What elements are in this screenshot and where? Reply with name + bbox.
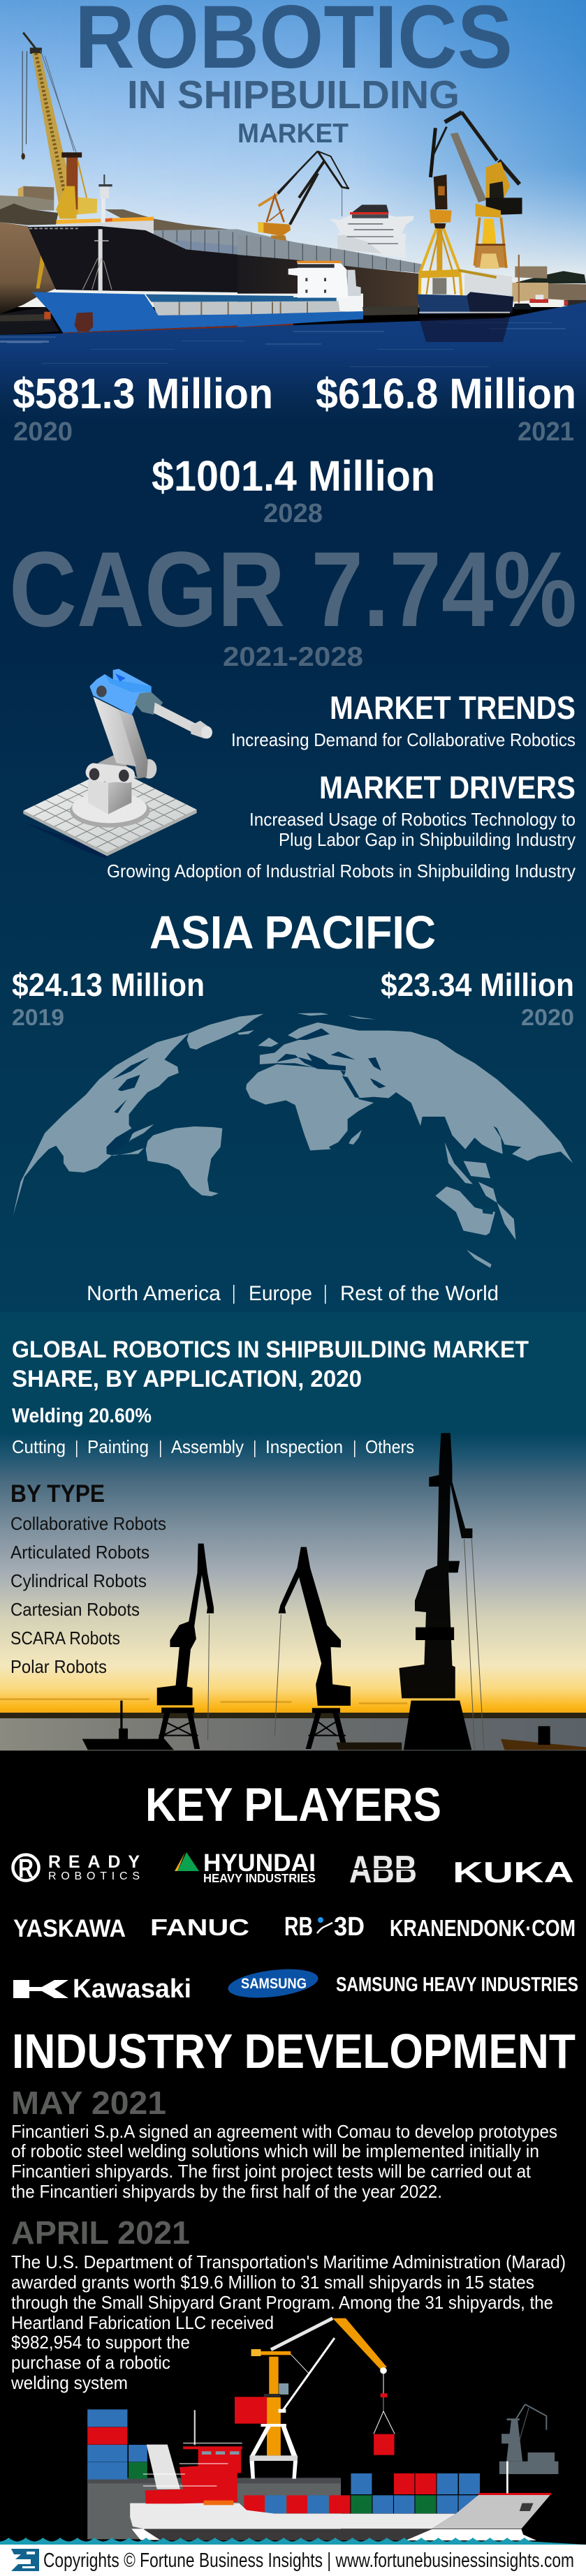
New Guinea: [497, 1203, 515, 1240]
body text: [11, 2121, 557, 2202]
Greenland and arctic: [187, 1014, 263, 1050]
ship containers: [244, 2473, 480, 2513]
body text: of robotic steel welding solutions which will be implemented initially in: [11, 2141, 539, 2161]
pole and islet: [518, 255, 520, 303]
Australia: [435, 1186, 495, 1235]
quay: [363, 306, 418, 315]
mast: [82, 174, 112, 292]
other applications: Others: [365, 1436, 414, 1457]
water: [0, 302, 586, 426]
Asia Pacific: [12, 907, 574, 1031]
key players logos: [13, 1847, 578, 2004]
title: [75, 0, 513, 149]
key players heading: KEY PLAYERS: [145, 1778, 441, 1831]
date: APRIL 2021: [11, 2214, 190, 2251]
hero photo: shipyard: [0, 0, 586, 426]
white superstructure: [330, 204, 414, 258]
stat 2028: $1001.4 Million: [152, 452, 435, 500]
cables: [208, 1539, 484, 1750]
yellow boom: [459, 270, 497, 277]
barge: [417, 292, 513, 314]
development: May 2021: [11, 2085, 557, 2202]
dock: [0, 307, 59, 336]
type 6: Polar Robots: [10, 1656, 107, 1677]
by type list: [10, 1480, 166, 1677]
sunset photo: cranes: [0, 1424, 586, 1750]
distant crane: [499, 2404, 558, 2474]
logo: Ready Robotics: READY: [48, 1852, 140, 1872]
logo: Ready Robotics: [13, 1852, 140, 1884]
body text: welding system: [10, 2372, 128, 2393]
other regions: Rest of the World: [340, 1282, 499, 1305]
type 3: Cylindrical Robots: [10, 1570, 147, 1591]
far shore: [512, 267, 586, 306]
quay: [87, 2478, 341, 2539]
UK: [258, 1038, 279, 1047]
logo: Fanuc: FANUC: [150, 1914, 249, 1940]
boat silhouettes: [82, 1701, 586, 1750]
body text: through the Small Shipyard Grant Program. Among the 31 shipyards, the: [11, 2292, 553, 2313]
stat 2021: $616.8 Million: [316, 370, 576, 417]
left yard: hill, crane base, black ship, blue ship bow: [0, 174, 293, 336]
type 5: SCARA Robots: [10, 1628, 120, 1648]
title line 3: MARKET: [237, 119, 349, 149]
yellow crane two lower: [474, 218, 506, 269]
logo: Ready Robotics: ROBOTICS: [48, 1870, 140, 1882]
year 2028: 2028: [263, 499, 323, 528]
logo: Hyundai Heavy Industries: HEAVY INDUSTRIES: [203, 1871, 316, 1885]
year 2020: 2020: [521, 1005, 574, 1031]
CAGR: [9, 530, 577, 672]
other applications: [12, 1436, 414, 1457]
white tug: [464, 271, 512, 298]
footer: [0, 2545, 586, 2576]
body text: The U.S. Department of Transportation's Maritime Administration (Marad): [11, 2251, 566, 2272]
right crane one top: [430, 112, 462, 209]
logo: RB3D: [284, 1912, 365, 1942]
by type heading: BY TYPE: [10, 1480, 105, 1507]
logo: Ready Robotics: R: [18, 1854, 34, 1884]
crane C silhouette: [399, 1433, 472, 1750]
ship bridge: [143, 2410, 242, 2505]
Eurasia: [260, 1022, 573, 1163]
seas: [277, 1028, 386, 1098]
logo: Hyundai Heavy Industries: HYUNDAI: [203, 1849, 316, 1877]
logo: ABB: ABB: [349, 1847, 417, 1891]
crane B silhouette: [279, 1547, 351, 1749]
body text: Heartland Fabrication LLC received: [11, 2312, 274, 2333]
other applications: Inspection: [265, 1436, 343, 1457]
water waves: [0, 2538, 586, 2545]
body text: awarded grants worth $19.6 Million to 31 small shipyards in 15 states: [11, 2272, 534, 2293]
Africa: [246, 1064, 374, 1150]
logo: Fortune Business Insights: [11, 2549, 39, 2571]
body text: the Fincantieri shipyards by the first half of the year 2022.: [11, 2181, 442, 2202]
logo: Samsung: [226, 1965, 320, 2002]
logo: Yaskawa: YASKAWA: [13, 1915, 126, 1942]
stat 2020: $581.3 Million: [13, 370, 273, 417]
logo: Samsung: SAMSUNG: [241, 1976, 307, 1992]
navy background: [0, 426, 586, 1312]
left crane jib: [22, 33, 87, 218]
region heading: ASIA PACIFIC: [149, 907, 436, 959]
right crane two top: [451, 112, 522, 218]
illustration: cargo ship and crane: [0, 2318, 586, 2545]
Hudson bay and lakes: [107, 1057, 149, 1154]
body text: Fincantieri S.p.A signed an agreement with Comau to develop prototypes: [11, 2121, 557, 2142]
other applications: Assembly: [171, 1436, 244, 1457]
date: MAY 2021: [11, 2085, 166, 2121]
application share heading: [12, 1337, 529, 1457]
center crane: [258, 173, 349, 242]
logo: RB3D: RB: [284, 1912, 313, 1942]
logo: KUKA: KUKA: [453, 1856, 574, 1889]
logo: Kawasaki: Kawasaki: [73, 1974, 191, 2004]
other regions: [87, 1282, 499, 1305]
other applications: Painting: [87, 1436, 149, 1457]
cargo and blue hull: [145, 295, 293, 302]
heading line 1: GLOBAL ROBOTICS IN SHIPBUILDING MARKET: [12, 1337, 529, 1363]
crane A silhouette: [156, 1544, 214, 1749]
market drivers: [107, 770, 576, 881]
stacked containers: [87, 2409, 147, 2480]
logo: RB3D: 3D: [334, 1912, 365, 1942]
center crane top: [277, 151, 349, 216]
value 2020: $23.34 Million: [381, 967, 574, 1003]
world map globe: [13, 1013, 573, 1268]
New Zealand: [467, 1250, 492, 1268]
development: April 2021: [10, 2214, 566, 2393]
CAGR period: 2021-2028: [223, 642, 363, 672]
North America: [13, 1034, 189, 1216]
Madagascar: [349, 1130, 362, 1145]
body text: $982,954 to support the: [11, 2332, 190, 2353]
other regions: Europe: [249, 1282, 312, 1305]
type 1: Collaborative Robots: [10, 1513, 166, 1534]
right yard: center crane, superstructure, bridge, yellow cranes: [237, 173, 586, 327]
ship hull right: [237, 255, 418, 309]
year 2020: 2020: [13, 417, 73, 447]
body text: purchase of a robotic: [11, 2352, 170, 2373]
type 4: Cartesian Robots: [10, 1599, 140, 1620]
Caribbean strip: [129, 1124, 154, 1142]
logo: Hyundai Heavy Industries: [175, 1849, 316, 1885]
icon: robot arm: [23, 669, 212, 859]
value 2019: $24.13 Million: [12, 967, 205, 1003]
harbour crane: [235, 2318, 395, 2479]
application panel background: [0, 1312, 586, 1431]
year 2019: 2019: [12, 1005, 64, 1031]
welding share: Welding 20.60%: [12, 1405, 152, 1427]
blue ship stern: [237, 261, 363, 327]
market size stats: [13, 370, 576, 528]
logo: Kawasaki: [13, 1974, 191, 2004]
ship hull: [130, 2462, 551, 2540]
Southeast Asia islands: [445, 1142, 473, 1184]
type 2: Articulated Robots: [10, 1542, 149, 1563]
other applications: Cutting: [12, 1436, 66, 1457]
body text: Fincantieri shipyards. The first joint project tests will be carried out at: [11, 2161, 532, 2182]
heading line 2: SHARE, BY APPLICATION, 2020: [12, 1366, 362, 1392]
other regions: North America: [87, 1282, 221, 1305]
title line 2: IN SHIPBUILDING: [127, 73, 460, 117]
body text: [10, 2251, 566, 2393]
South America: [146, 1126, 222, 1196]
yellow crane one lower: [418, 209, 462, 295]
year 2021: 2021: [518, 417, 574, 447]
gray containers: [237, 235, 421, 273]
market trends: [231, 690, 576, 750]
crane tops: [22, 33, 522, 218]
